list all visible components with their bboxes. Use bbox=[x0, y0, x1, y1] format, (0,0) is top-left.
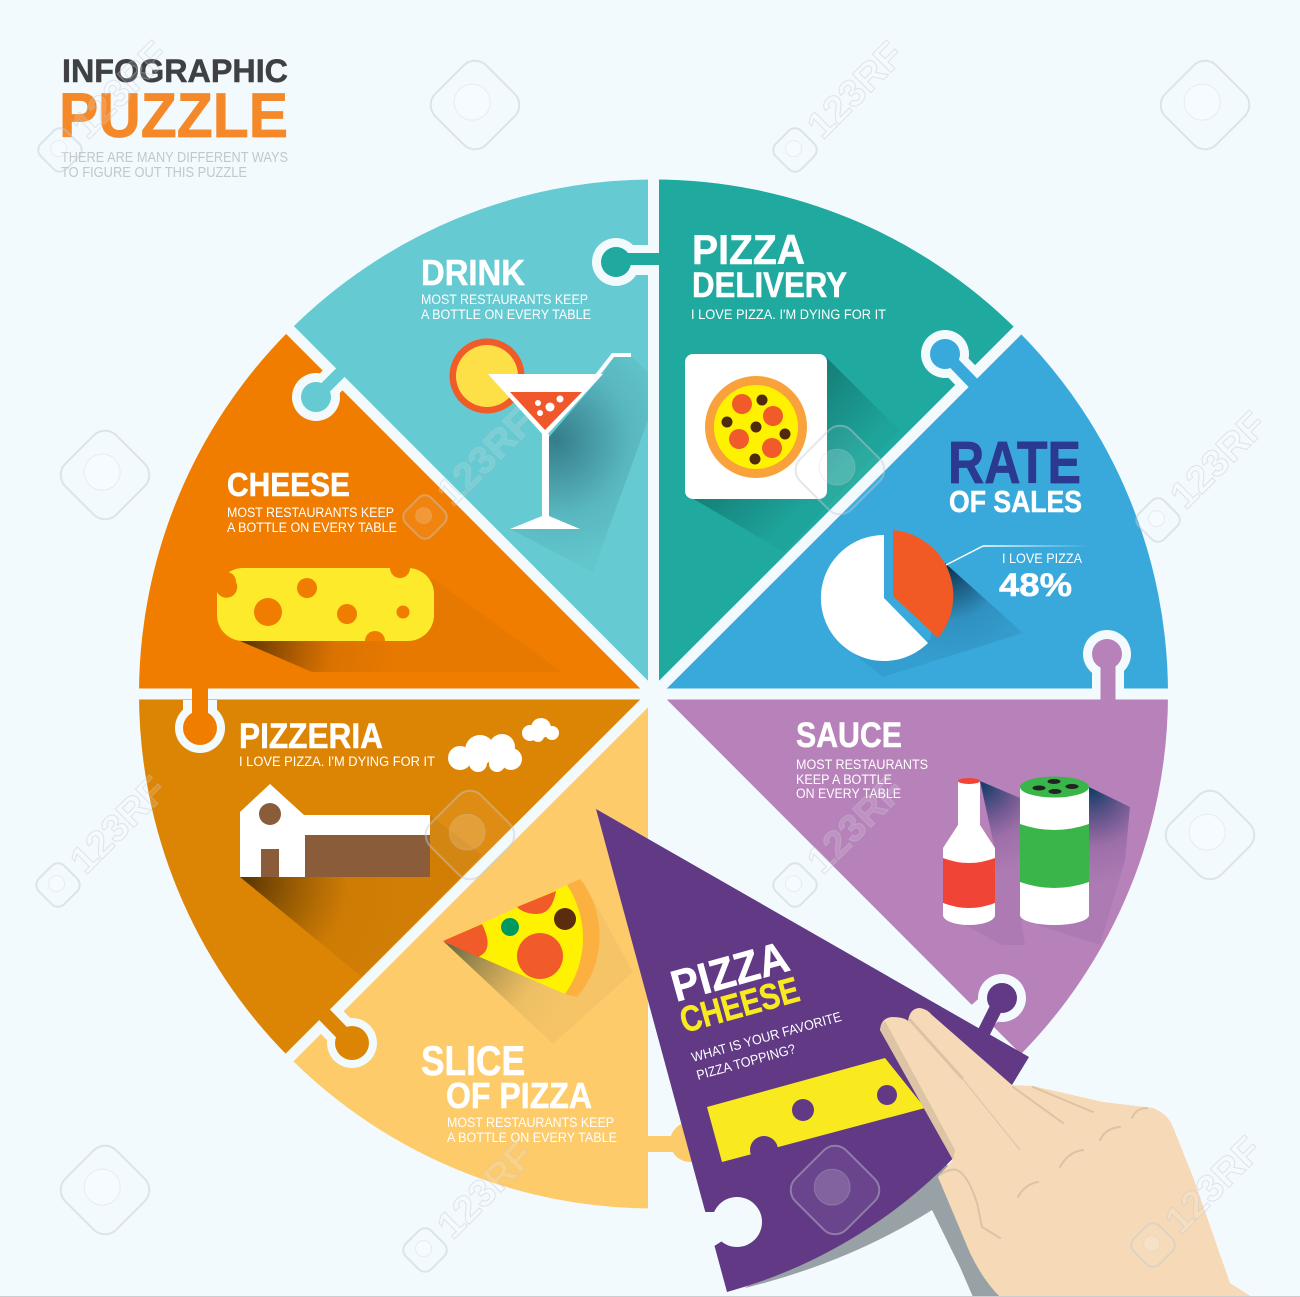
watermarks: 123RF logos: 123RF bbox=[799, 769, 912, 882]
text: drink body bbox=[421, 292, 591, 322]
heading: slice of pizza: OF PIZZA bbox=[446, 1075, 592, 1116]
text: sauce body: KEEP A BOTTLE bbox=[796, 772, 892, 787]
heading: pizza delivery bbox=[692, 226, 847, 305]
text: drink body: A BOTTLE ON EVERY TABLE bbox=[421, 307, 591, 322]
icon: clouds bbox=[448, 718, 559, 772]
subtitle bbox=[61, 149, 288, 181]
text: question bbox=[690, 1009, 843, 1083]
icon: sauce bottle bbox=[943, 778, 1025, 945]
title: infographic: INFOGRAPHIC bbox=[62, 53, 288, 89]
subtitle: THERE ARE MANY DIFFERENT WAYS bbox=[61, 149, 288, 166]
text: slice body bbox=[447, 1115, 617, 1145]
icon: pizza box bbox=[685, 354, 899, 552]
heading: pizzeria: PIZZERIA bbox=[239, 717, 383, 756]
panel content: pizza delivery bbox=[685, 226, 899, 552]
tab: cheese into pizzeria bbox=[175, 686, 225, 753]
text: slice body: A BOTTLE ON EVERY TABLE bbox=[447, 1130, 617, 1145]
icon: pizzeria building bbox=[240, 784, 482, 977]
callout: 48 percent: I LOVE PIZZA bbox=[1002, 551, 1082, 566]
heading: rate of sales: OF SALES bbox=[949, 484, 1082, 519]
panel: drink sector bbox=[290, 180, 654, 694]
heading: rate of sales: RATE bbox=[948, 430, 1081, 496]
icon: cocktail bbox=[450, 338, 648, 572]
callout: 48 percent bbox=[999, 551, 1082, 603]
heading: sauce: SAUCE bbox=[796, 716, 902, 755]
text: slice body: MOST RESTAURANTS KEEP bbox=[447, 1115, 614, 1130]
panel: slice of pizza sector bbox=[290, 694, 654, 1208]
panel: pizza delivery sector bbox=[654, 180, 1017, 694]
panel content: rate of sales bbox=[821, 430, 1090, 677]
hand shadow bbox=[745, 1160, 1010, 1297]
heading: pizza delivery: DELIVERY bbox=[692, 266, 847, 305]
piece body bbox=[596, 809, 1029, 1292]
hand bbox=[880, 1008, 1252, 1297]
panel: purple pizza cheese piece bbox=[596, 809, 1029, 1292]
watermarks: 123RF logos: 123RF bbox=[429, 1134, 542, 1247]
tab: delivery into drink bbox=[592, 238, 662, 286]
tab gap on sauce bbox=[975, 974, 1026, 1022]
watermarks: 123RF logos: 123RF bbox=[64, 34, 177, 147]
icon: cheese strip bbox=[707, 1058, 925, 1164]
bottom edge line bbox=[0, 1296, 1300, 1297]
panel: cheese sector bbox=[139, 330, 654, 694]
text: sauce body bbox=[796, 757, 928, 801]
text: drink body: MOST RESTAURANTS KEEP bbox=[421, 292, 588, 307]
tab: rate into delivery bbox=[921, 330, 975, 385]
text: delivery body: I LOVE PIZZA. I'M DYING FOR IT bbox=[691, 307, 886, 322]
watermarks: 123RF logos: 123RF bbox=[1162, 404, 1275, 517]
notch bbox=[700, 1197, 762, 1250]
text: pizzeria body: I LOVE PIZZA. I'M DYING FOR IT bbox=[239, 754, 435, 769]
finger edge shading bbox=[880, 1021, 955, 1160]
heading: cheese: CHEESE bbox=[227, 466, 350, 503]
callout line bbox=[946, 546, 1090, 565]
watermarks: 123RF logos: 123RF bbox=[429, 401, 542, 514]
panel content: cheese bbox=[217, 466, 562, 672]
text: cheese body: MOST RESTAURANTS KEEP bbox=[227, 505, 394, 520]
watermarks: 123RF logos: 123RF bbox=[799, 34, 912, 147]
subtitle: TO FIGURE OUT THIS PUZZLE bbox=[61, 164, 247, 181]
title: puzzle: PUZZLE bbox=[59, 81, 288, 151]
watermarks: 123RF logos: 123RF bbox=[62, 769, 175, 882]
chart: pie bbox=[821, 530, 1023, 677]
heading: drink: DRINK bbox=[421, 252, 525, 293]
panel content: pizzeria bbox=[239, 717, 559, 977]
heading: slice of pizza bbox=[421, 1037, 592, 1116]
text: cheese body: A BOTTLE ON EVERY TABLE bbox=[227, 520, 397, 535]
icon: cheese block bbox=[217, 568, 562, 672]
watermarks: 123RF logos: 123RF bbox=[1157, 1129, 1270, 1242]
title block bbox=[59, 53, 288, 181]
heading: pizza delivery: PIZZA bbox=[692, 226, 805, 273]
panel content: drink bbox=[421, 252, 648, 572]
text: cheese body bbox=[227, 505, 397, 535]
heading: pizza cheese: PIZZA bbox=[666, 932, 794, 1012]
icon: pizza slice bbox=[443, 879, 633, 1044]
piece tab bbox=[982, 983, 1017, 1036]
heading: rate of sales bbox=[948, 430, 1082, 519]
tab: sauce into rate bbox=[1083, 630, 1131, 702]
text: sauce body: ON EVERY TABLE bbox=[796, 786, 901, 801]
puzzle wheel bbox=[130, 170, 1178, 1215]
hand creases bbox=[910, 1020, 1147, 1238]
tab: slice into cheese piece bbox=[646, 1122, 710, 1162]
text: question: WHAT IS YOUR FAVORITE bbox=[690, 1009, 843, 1065]
tab: pizzeria into slice bbox=[318, 1008, 377, 1068]
text: question: PIZZA TOPPING? bbox=[695, 1041, 797, 1083]
heading: pizza cheese: CHEESE bbox=[675, 969, 804, 1041]
panel: sauce sector bbox=[654, 694, 1168, 1058]
callout: 48 percent: 48% bbox=[999, 567, 1072, 603]
heading: slice of pizza: SLICE bbox=[421, 1037, 525, 1084]
sector gaps bbox=[130, 170, 1178, 1215]
text: sauce body: MOST RESTAURANTS bbox=[796, 757, 928, 772]
panel content: sauce bbox=[796, 716, 1130, 945]
tab: drink into cheese bbox=[292, 368, 345, 421]
panel content: slice of pizza bbox=[421, 879, 633, 1145]
icon: shaker bbox=[1020, 776, 1130, 945]
panel: rate of sales sector bbox=[654, 330, 1168, 694]
panel: pizzeria sector bbox=[139, 694, 654, 1058]
